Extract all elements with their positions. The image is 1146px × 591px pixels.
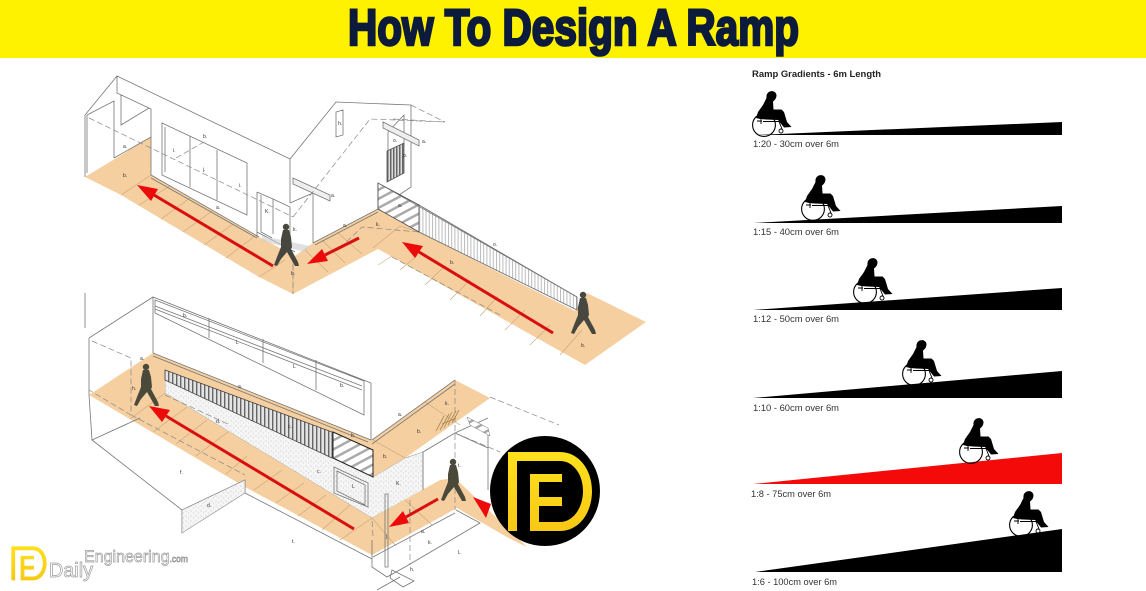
lower planter block — [182, 480, 245, 533]
upper drawing letter tags: i. — [173, 148, 176, 154]
lower drawing letter tags: d. — [207, 503, 211, 509]
upper drawing letter tags: b. — [581, 343, 585, 349]
door step grille — [262, 236, 310, 252]
gradient 1:12 — [753, 258, 1062, 325]
gradient 1:12: 1:12 - 50cm over 6m — [753, 314, 839, 325]
person walking: ramp start — [571, 292, 596, 334]
upper drawing letter tags: b. — [123, 173, 127, 179]
lower drawing letter tags: b. — [383, 454, 387, 460]
gradient 1:20 — [753, 91, 1062, 150]
lower drawing letter tags: k. — [445, 401, 449, 407]
dashed roof projections — [89, 105, 500, 315]
lower drawing letter tags: k. — [428, 540, 432, 546]
upper drawing letter tags: a. — [422, 139, 426, 145]
upper drawing letter tags: o. — [393, 138, 397, 144]
upper drawing letter tags: k. — [293, 227, 297, 233]
lower drawing letter tags: a. — [140, 356, 144, 362]
lower isometric ramp drawing — [85, 293, 559, 590]
gradient 1:15: 1:15 - 40cm over 6m — [753, 227, 839, 238]
watermark: Daily Engineering.com: Engineering.com — [84, 547, 188, 566]
watermark: Daily Engineering.com: Daily — [49, 560, 93, 582]
lower drawing letter tags: L — [409, 509, 412, 515]
red arrow: lower landing — [389, 499, 438, 527]
upper floor and ramp surface — [85, 137, 646, 365]
round DE logo — [490, 436, 600, 546]
person walking: upper landing — [274, 224, 299, 266]
lower drawing letter tags: a. — [238, 384, 242, 390]
upper drawing letter tags: a. — [123, 144, 127, 150]
upper drawing letter tags: b. — [203, 134, 207, 140]
canopies — [293, 122, 419, 201]
lower drawing letter tags: L — [352, 484, 355, 490]
upper drawing letter tags: K. — [265, 209, 270, 215]
lower drawing letter tags: h. — [410, 567, 414, 573]
person walking: top of lower ramp — [134, 364, 159, 406]
lower stone wall — [165, 372, 423, 518]
lower drawing letter tags: L — [293, 364, 296, 370]
title: How To Design A Ramp — [348, 0, 799, 56]
lower drawing letter tags: j — [385, 534, 387, 540]
gradient 1:10 — [753, 340, 1062, 414]
lower drawing letter tags: t. — [458, 463, 461, 469]
small DE logo — [11, 546, 47, 580]
gradient 1:6 — [752, 491, 1062, 588]
red arrow: upper landing — [307, 238, 359, 264]
upper drawing letter tags: a. — [331, 193, 335, 199]
lower drawing letter tags: c. — [288, 424, 292, 430]
lower drawing letter tags: b. — [351, 433, 355, 439]
upper drawing letter tags: o. — [493, 242, 497, 248]
upper drawing letter tags: p. — [403, 153, 407, 159]
lower drawing letter tags: t. — [292, 539, 295, 545]
lower drawing letter tags: b. — [417, 429, 421, 435]
lower ramp railing — [165, 370, 332, 458]
upper drawing letter tags: i. — [239, 183, 242, 189]
upper ramp railing — [419, 205, 577, 310]
lower drawing letter tags: a. — [398, 412, 402, 418]
panel: ramp gradients — [751, 69, 1062, 588]
gradient 1:6: 1:6 - 100cm over 6m — [752, 577, 837, 588]
lower drawing letter tags — [132, 313, 461, 573]
red arrow: upper ramp run — [402, 242, 553, 333]
upper drawing letter tags: b. — [450, 260, 454, 266]
lower drawing letter tags: c. — [317, 469, 321, 475]
red arrow: lower main run — [149, 406, 354, 529]
person walking: lower landing — [441, 459, 466, 501]
gradient 1:8 highlighted: 1:8 - 75cm over 6m — [751, 489, 831, 500]
lower stairs window — [333, 432, 373, 477]
upper drawing letter tags: a. — [216, 205, 220, 211]
lower drawing letter tags: f. — [180, 470, 183, 476]
upper stairs detail — [378, 183, 419, 232]
red arrow: behind logo — [473, 497, 491, 518]
gradient 1:8 highlighted — [751, 418, 1062, 500]
gradient 1:10: 1:10 - 60cm over 6m — [753, 403, 839, 414]
header banner — [0, 0, 1146, 58]
upper drawing letter tags: k. — [376, 222, 380, 228]
gradient 1:15 — [753, 175, 1062, 238]
lower drawing letter tags: a. — [421, 529, 425, 535]
iron gate — [387, 143, 404, 182]
lower drawing letter tags: b. — [340, 383, 344, 389]
upper drawing letter tags: a. — [343, 223, 347, 229]
upper drawing letter tags — [123, 121, 585, 349]
lower drawing letter tags: L — [458, 550, 461, 556]
lower drawing letter tags: h. — [132, 386, 136, 392]
watermark: Daily Engineering.com — [11, 546, 188, 582]
red arrow: upper left run — [137, 185, 273, 266]
lower house wall outlines — [85, 293, 488, 590]
upper drawing letter tags: h. — [338, 121, 342, 127]
lower drawing letter tags: d. — [216, 419, 220, 425]
upper drawing letter tags: b. — [291, 271, 295, 277]
upper house wall outlines — [85, 76, 419, 255]
lower floor and ramp surface — [89, 353, 527, 555]
gradient 1:20: 1:20 - 30cm over 6m — [753, 139, 839, 150]
upper isometric ramp drawing — [85, 76, 646, 365]
upper drawing letter tags: j. — [202, 167, 206, 173]
gradients heading: Ramp Gradients - 6m Length — [752, 69, 881, 80]
upper drawing letter tags: a. — [398, 203, 402, 209]
lower drawing letter tags: K. — [396, 481, 401, 487]
lower drawing letter tags: b. — [183, 313, 187, 319]
hatched planting detail — [436, 410, 459, 431]
lower dashed projections — [89, 341, 559, 565]
lower drawing letter tags: L — [236, 340, 239, 346]
